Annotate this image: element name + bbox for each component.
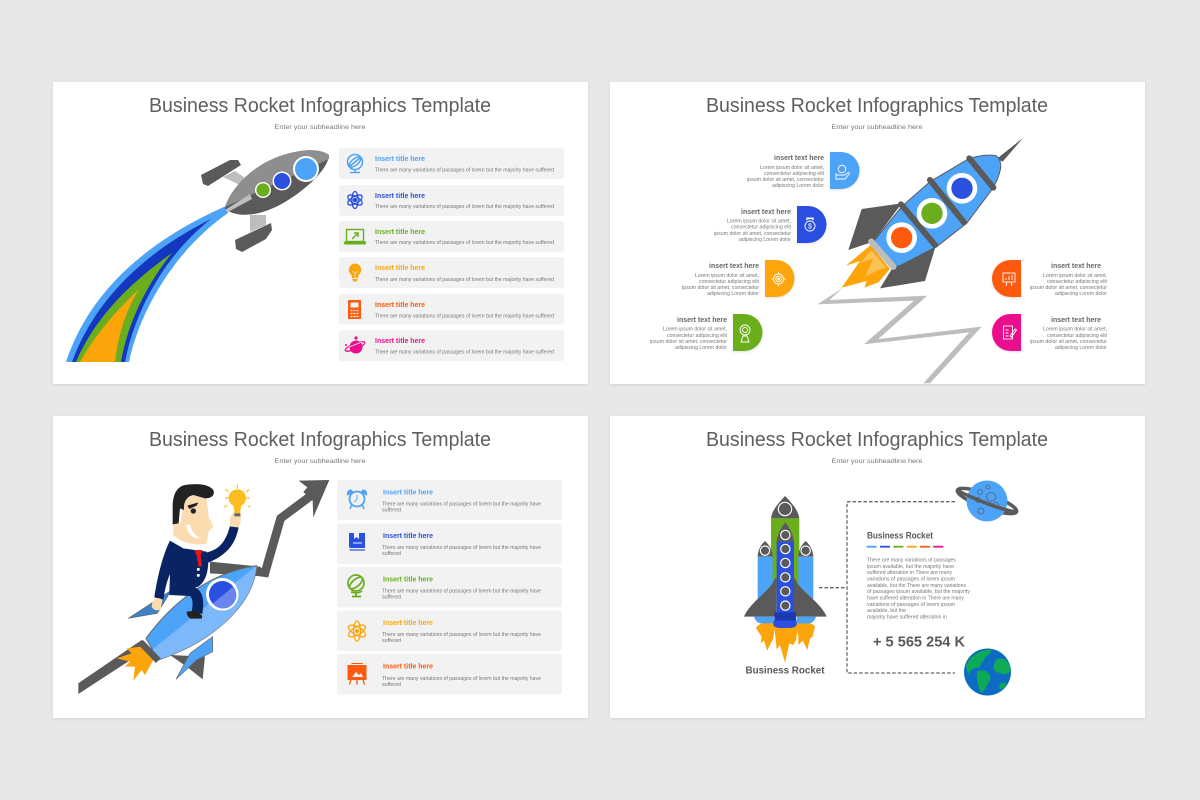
list row 3: There are many variations of passages of lorem but the majority have [382, 588, 541, 594]
tab 2: money bag: ipsum dolor sit amet, consectetur [714, 231, 791, 237]
icon: space shuttle [744, 496, 827, 663]
subtitle: slide 3: Enter your subheadline here [274, 458, 366, 465]
list row 3: suffered [382, 594, 401, 600]
list row 1: suffered [382, 508, 401, 514]
illustration: businessman riding rocket along growth arrow [78, 480, 329, 694]
tab 4: radar: Lorem ipsum dolor sit amet, [663, 326, 727, 332]
list row 4: suffered [382, 638, 401, 644]
list row 5 [339, 294, 564, 324]
list row 1: There are many variations of passages of lorem but the majority have [382, 502, 541, 508]
text block: description: of passages ipsum available, but the majority [867, 589, 970, 595]
list row 2 [339, 185, 564, 216]
list row 3: Insert title here [383, 576, 433, 584]
rainbow exhaust trail [66, 206, 228, 362]
text block: description: variations of passages of lorem ipsum [867, 576, 955, 582]
tab 2: money bag: insert text here [741, 209, 791, 216]
tab 1: hand coin [747, 152, 860, 189]
statistic: + 5 565 254 K [873, 634, 965, 650]
list row 2 [337, 524, 562, 564]
title: slide 2: Business Rocket Infographics Template [706, 95, 1048, 117]
tab 5: presentation board: ipsum dolor sit amet, consectetur [1030, 285, 1107, 291]
zigzag smoke trail [817, 288, 982, 383]
list row 5 [337, 654, 562, 694]
figure: businessman [152, 484, 241, 619]
icon: document with pencil [1004, 326, 1016, 339]
icon: laptop [344, 230, 366, 244]
icon: grey rocket [201, 150, 329, 252]
tab 4: radar: insert text here [677, 317, 727, 324]
arrow: growth line [78, 480, 329, 694]
list row 2: There are many variations of passages of lorem but the majority have suffered [375, 204, 554, 210]
list row 1: There are many variations of passages of lorem but the majority have suffered [375, 168, 554, 174]
tab 3: target: insert text here [709, 263, 759, 270]
tab 6: document pencil: adipiscing Lorem dolor [1055, 345, 1107, 351]
panel: slide 2 rocket with tabs [610, 82, 1145, 384]
tab 3: target: adipiscing Lorem dolor [707, 291, 759, 297]
list row 6 [339, 330, 564, 361]
list row 5: There are many variations of passages of lorem but the majority have suffered [375, 314, 554, 320]
icon: target [772, 272, 786, 286]
list row 4: There are many variations of passages of lorem but the majority have suffered [375, 277, 554, 283]
tab 3: target [682, 260, 794, 297]
icon: planet [344, 336, 366, 354]
icon: blue rocket [842, 138, 1023, 288]
icon: light bulb [349, 264, 361, 282]
subtitle: slide 1: Enter your subheadline here [274, 124, 366, 131]
tab 2: money bag: adipiscing Lorem dolor [739, 237, 791, 243]
text block: description: There are many variations of passages [867, 558, 956, 564]
tab 6: document pencil: Lorem ipsum dolor sit amet, [1043, 326, 1107, 332]
list row 5: Insert title here [375, 302, 425, 309]
icon: radar [740, 325, 750, 342]
list row 2: suffered [382, 551, 401, 557]
tab 4: radar [650, 314, 762, 351]
text block: description: ipsum available, but the majority have [867, 564, 954, 570]
tab 4: radar: adipiscing Lorem dolor [675, 345, 727, 351]
icon: globe [348, 154, 362, 172]
list row 5: Insert title here [383, 664, 433, 670]
icon: calculator [348, 300, 361, 319]
icon: picture easel [348, 664, 366, 684]
tab 6: document pencil: consectetur adipiscing elit [1047, 333, 1108, 339]
list row 4 [339, 257, 564, 288]
tab 2: money bag [714, 206, 827, 243]
tab 3: target: consectetur adipiscing elit [699, 279, 760, 285]
tab 6: document pencil: ipsum dolor sit amet, consectetur [1030, 339, 1107, 345]
icon: ringed planet [955, 480, 1019, 522]
list row 5: There are many variations of passages of lorem but the majority have [382, 676, 541, 682]
tab 6: document pencil [992, 314, 1108, 351]
title: slide 3: Business Rocket Infographics Template [149, 429, 491, 451]
icon: presentation board [1003, 273, 1015, 286]
tab 1: hand coin: insert text here [774, 155, 824, 162]
tab 5: presentation board: consectetur adipiscing elit [1047, 279, 1108, 285]
text block: description: majority have suffered alteration in [867, 614, 947, 620]
subtitle: slide 4: Enter your subheadline here [832, 458, 923, 465]
icon: earth [964, 648, 1011, 696]
tab 4: radar: ipsum dolor sit amet, consectetur [650, 339, 727, 345]
heading: Business Rocket: Business Rocket [867, 530, 933, 540]
title: slide 4: Business Rocket Infographics Template [706, 429, 1048, 451]
list row 2: Insert title here [383, 533, 433, 540]
tab 6: document pencil: insert text here [1051, 317, 1101, 324]
list row 1: Insert title here [383, 490, 433, 496]
list row 2: Insert title here [375, 193, 425, 200]
tab 5: presentation board: insert text here [1051, 263, 1101, 270]
title: slide 1: Business Rocket Infographics Template [149, 95, 491, 117]
list row 1 [339, 148, 564, 179]
panel: slide 1 rocket with rainbow trail [53, 82, 588, 384]
list row 1: Insert title here [375, 156, 425, 163]
tab 4: radar: consectetur adipiscing elit [667, 333, 728, 339]
tab 3: target: Lorem ipsum dolor sit amet, [695, 273, 759, 279]
text block: description: available, but the [867, 608, 906, 614]
list row 3 [337, 567, 562, 608]
list row 4: Insert title here [375, 265, 425, 272]
tab 2: money bag: consectetur adipiscing elit [731, 225, 792, 231]
text block: description: suffered alteration in There are many [867, 570, 952, 576]
icon: atom [346, 192, 364, 208]
list row 3 [339, 221, 564, 252]
icon: light bulb [224, 485, 250, 516]
dashed connector [819, 502, 955, 673]
label: shuttle name: Business Rocket [746, 664, 825, 676]
text block: description: have suffered alteration in There are many [867, 596, 964, 602]
panel: slide 3 businessman on rocket [53, 416, 588, 718]
tab 5: presentation board: adipiscing Lorem dolor [1055, 291, 1107, 297]
list row 4: There are many variations of passages of lorem but the majority have [382, 632, 541, 638]
list row 4 [337, 610, 562, 651]
tab 1: hand coin: Lorem ipsum dolor sit amet, [760, 165, 824, 171]
icon: rocket [117, 566, 257, 681]
colour legend bars [867, 546, 943, 548]
panel: slide 4 shuttle and planets [610, 416, 1145, 718]
text block: description: variations of passages of lorem ipsum [867, 602, 955, 608]
icon: alarm clock [347, 490, 367, 509]
tab 2: money bag: Lorem ipsum dolor sit amet, [727, 218, 791, 224]
tab 5: presentation board: Lorem ipsum dolor sit amet, [1043, 273, 1107, 279]
text block: description: available, but the There are many variations [867, 583, 966, 589]
icon: money bag: $ [808, 224, 812, 230]
text block: description [867, 558, 970, 620]
tab 1: hand coin: consectetur adipiscing elit [764, 171, 825, 177]
list row 5: suffered [382, 682, 401, 688]
list row 2: There are many variations of passages of lorem but the majority have [382, 545, 541, 551]
list row 6: Insert title here [375, 338, 425, 345]
icon: globe [348, 575, 364, 596]
list row 3: Insert title here [375, 229, 425, 236]
list row 1 [337, 480, 562, 520]
icon: atom [347, 621, 367, 641]
icon: book [349, 533, 365, 550]
icon: hand with coin [836, 165, 850, 179]
list row 6: There are many variations of passages of lorem but the majority have suffered [375, 350, 554, 356]
tab 1: hand coin: adipiscing Lorem dolor [772, 183, 824, 189]
subtitle: slide 2: Enter your subheadline here [832, 124, 923, 131]
tab 1: hand coin: ipsum dolor sit amet, consectetur [747, 177, 824, 183]
list row 3: There are many variations of passages of lorem but the majority have suffered [375, 240, 554, 246]
list row 4: Insert title here [383, 620, 433, 627]
tab 5: presentation board [992, 260, 1108, 297]
tab 3: target: ipsum dolor sit amet, consectetur [682, 285, 759, 291]
